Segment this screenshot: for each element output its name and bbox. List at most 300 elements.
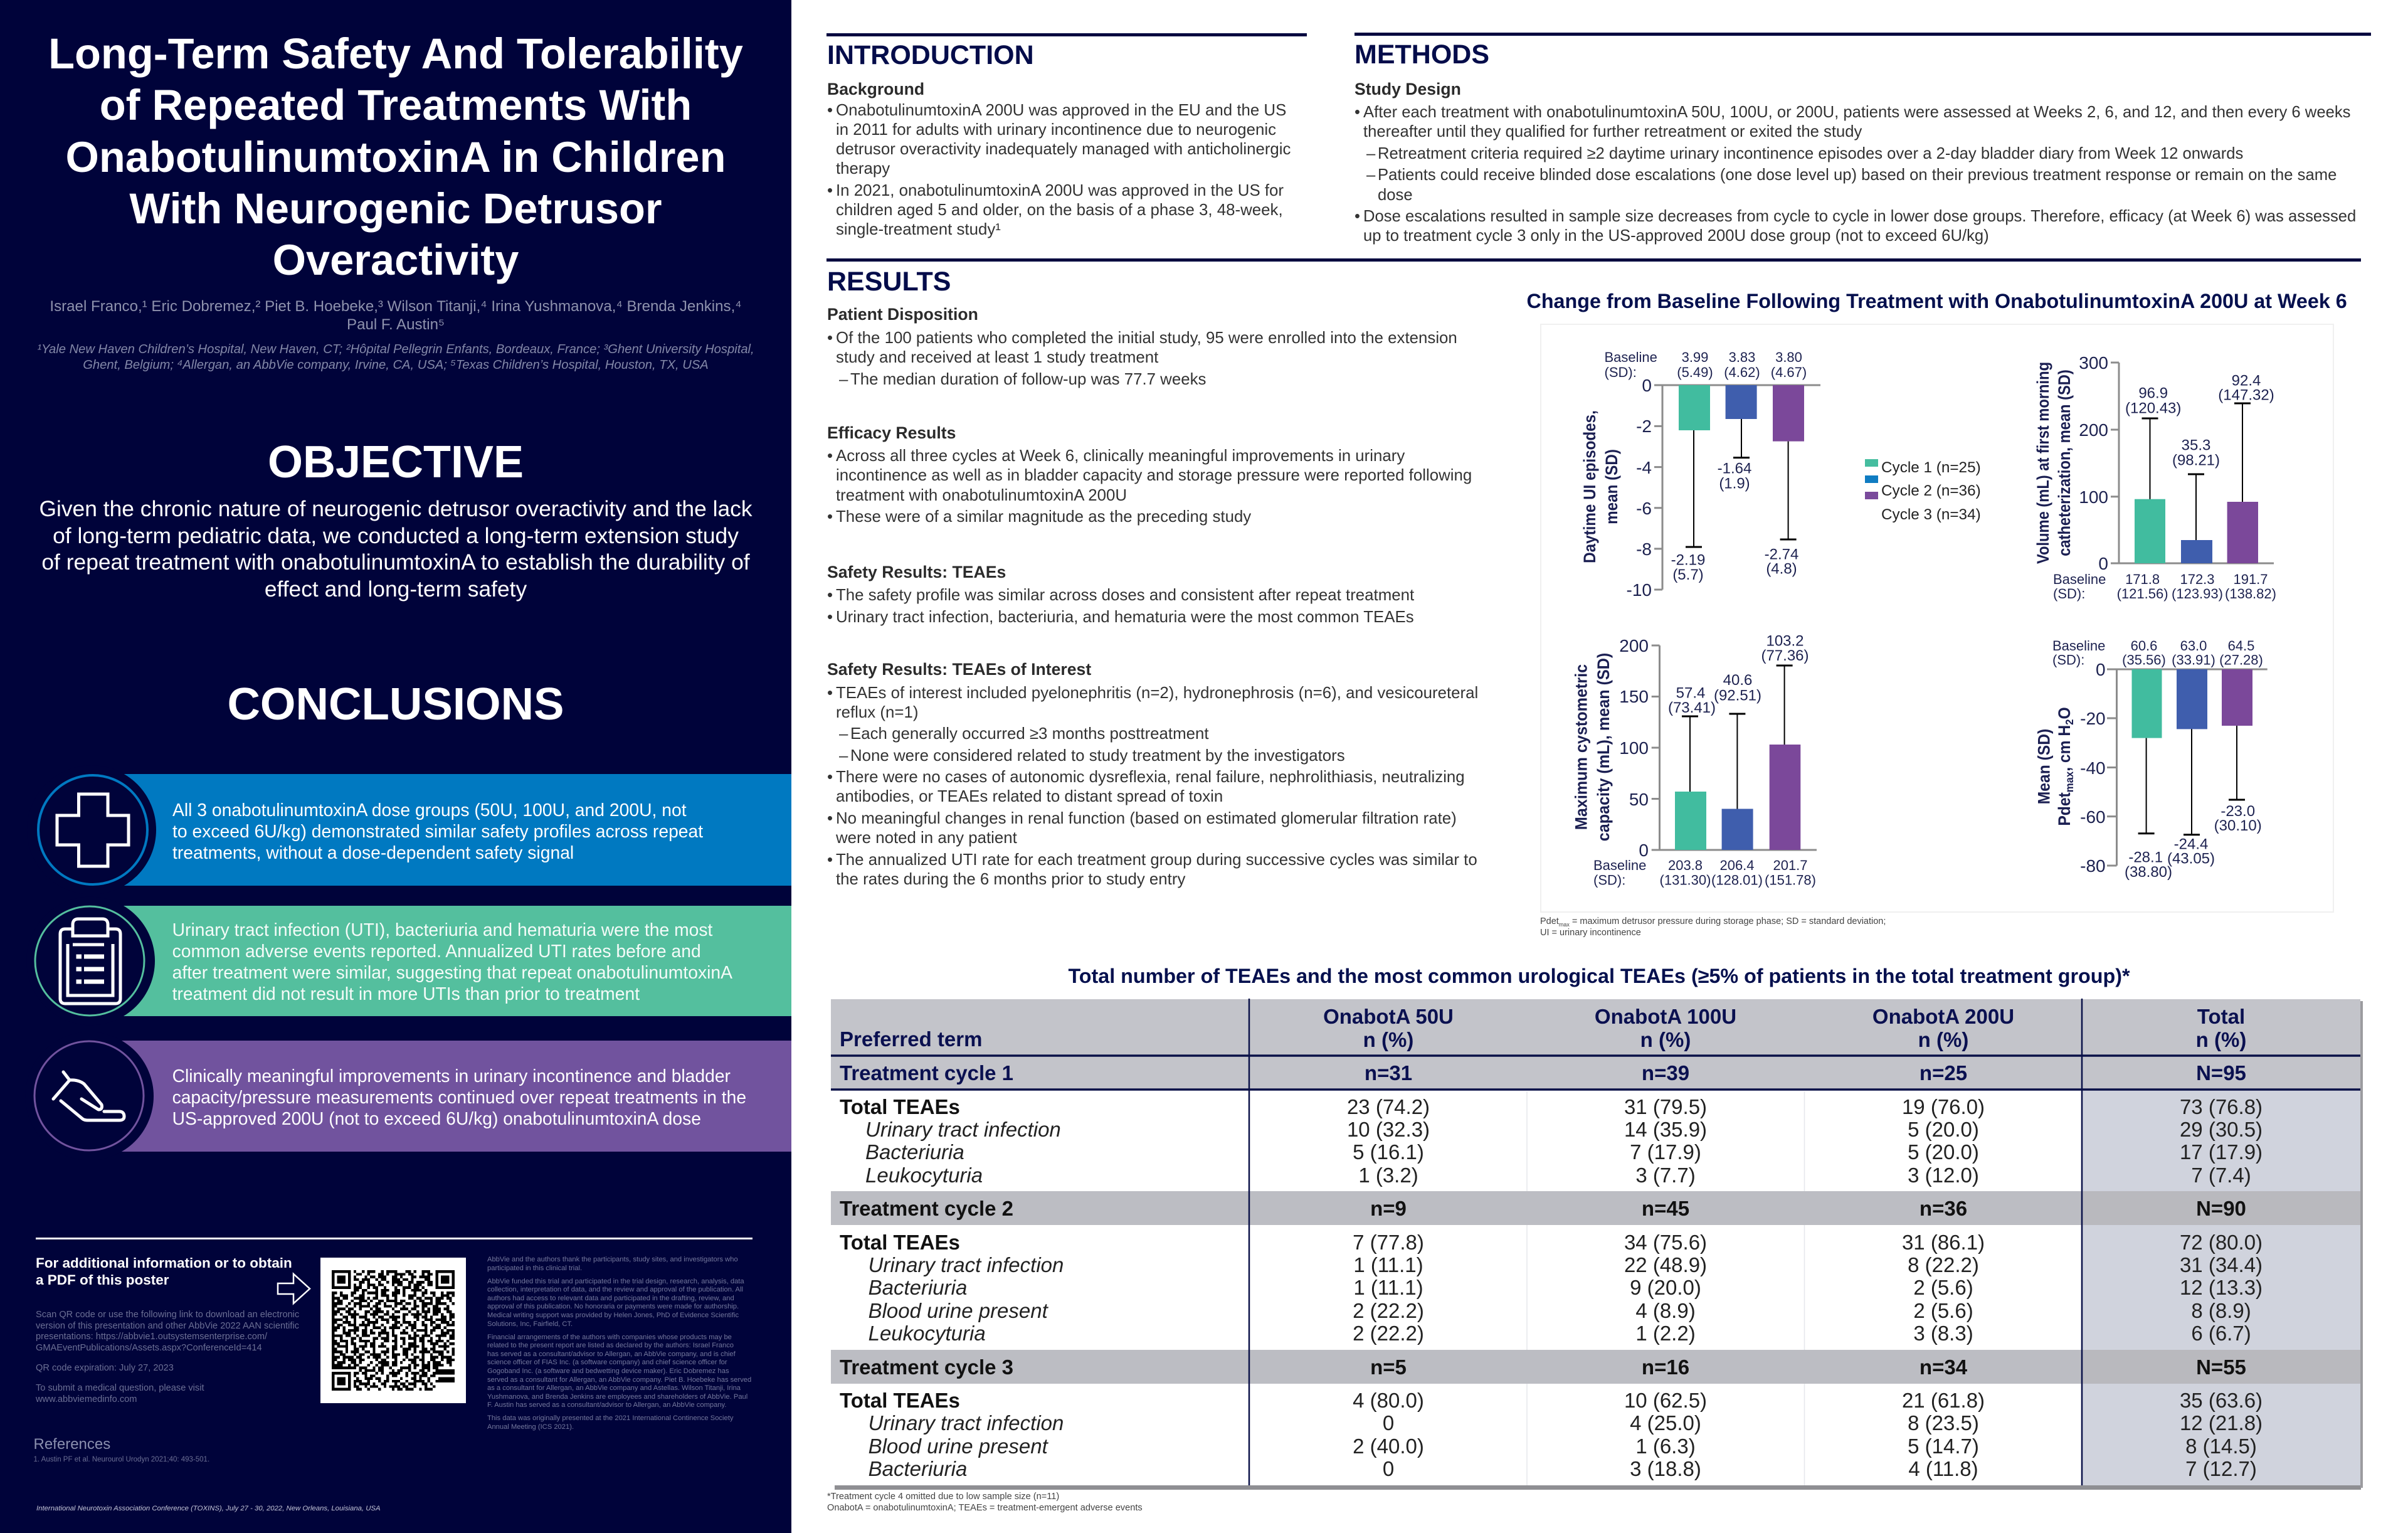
study design bullets: After each treatment with onabotulinumtoxinA 50U, 100U, or 200U, patients were assessed at Weeks 2, 6, and 12, and then every 6 weeks [1363,103,2350,121]
treatment cycle 3 rows: Total TEAEs [840,1389,960,1412]
objective text: of long-term pediatric data, we conducted a long-term extension study [53,523,739,548]
acknowledgements and disclosures: Medical writing support was provided by Helen Jones, PhD of Evidence Scientific [487,1312,739,1319]
chart: Pdetmax: Pdet [2056,792,2074,826]
chart: daytime UI episodes: -2 [1636,416,1652,436]
poster PDF heading [36,1255,292,1288]
treatment cycle 1 rows: 14 (35.9) [1624,1118,1707,1141]
treatment cycle 1 rows: 23 (74.2) [1347,1095,1430,1118]
download instructions: Scan QR code or use the following link to download an electronic [36,1310,299,1320]
chart: daytime UI episodes: Daytime UI episodes, [1581,410,1599,563]
TEAEs of interest bullets: TEAEs of interest included pyelonephritis (n=2), hydronephrosis (n=6), and vesicoureteral [836,684,1478,702]
background bullets: single-treatment study¹ [836,221,1001,238]
authors [50,298,742,333]
TEAEs of interest bullets: • [827,851,833,868]
table footnote: OnabotA = onabotulinumtoxinA; TEAEs = treatment-emergent adverse events [827,1503,1143,1513]
treatment cycle 1 rows: 19 (76.0) [1902,1095,1985,1118]
treatment cycle 1 rows: 7 (17.9) [1630,1140,1701,1164]
chart: maximum cystometric capacity: Baseline [1593,857,1646,873]
chart: maximum cystometric capacity: (151.78) [1765,872,1816,888]
treatment cycle 3 rows: Bacteriuria [869,1457,967,1480]
treatment cycle 3 rows: 8 (23.5) [1908,1411,1979,1435]
treatment cycle 2 rows: Blood urine present [869,1299,1049,1322]
chart: daytime UI episodes: mean (SD) [1603,449,1621,524]
treatment cycle 1 rows: 5 (20.0) [1908,1140,1979,1164]
chart: Pdetmax: 60.6 [2131,638,2157,654]
chart: daytime UI episodes: -10 [1627,580,1652,600]
treatment cycle 2 rows: 1 (11.1) [1353,1276,1423,1299]
chart: daytime UI episodes: -8 [1636,539,1652,559]
chart: daytime UI episodes: (1.9) [1719,475,1750,492]
chart: maximum cystometric capacity: 200 [1619,636,1649,655]
chart: Pdetmax: 64.5 [2228,638,2254,654]
chart: Pdetmax: (SD): [2052,652,2084,667]
treatment cycle 2 rows [840,1231,2263,1345]
treatment cycle 2 rows: Leukocyturia [869,1322,986,1345]
patient disposition bullets: – [839,371,848,388]
acknowledgements and disclosures: This data was originally presented at the 2021 International Continence Society [487,1414,733,1422]
treatment cycle 2 rows: 8 (22.2) [1908,1253,1979,1276]
chart: daytime UI episodes: Baseline [1604,349,1657,365]
legend: Cycle 2 (n=36) [1881,482,1981,499]
treatment cycle 2 rows: Urinary tract infection [869,1253,1064,1276]
patient disposition bullets [827,329,1457,388]
treatment cycle 3 header: n=5 [1370,1355,1407,1379]
chart: Pdetmax: -23.0 [2221,803,2255,820]
patient disposition bullets: The median duration of follow-up was 77.7 weeks [850,371,1206,388]
acknowledgements and disclosures: Gogoband Inc. (a software and bedwetting device maker). Eric Dobremez has [487,1367,729,1375]
treatment cycle 3 rows: 7 (12.7) [2185,1457,2257,1480]
treatment cycle 1 rows: 10 (32.3) [1347,1118,1430,1141]
treatment cycle 3 header: n=34 [1920,1355,1968,1379]
treatment cycle 2 rows: 3 (8.3) [1913,1322,1973,1345]
chart: volume at first morning catheterization: 92.4 [2232,373,2261,389]
treatment cycle 3 rows: 1 (6.3) [1635,1435,1696,1458]
chart: daytime UI episodes: (4.8) [1766,561,1797,577]
QR code expiration: QR code expiration: July 27, 2023 [36,1363,174,1373]
table header row: n (%) [1363,1028,1413,1051]
chart: maximum cystometric capacity: 57.4 [1676,685,1705,701]
conclusion 3 text: capacity/pressure measurements continued over repeat treatments in the [172,1087,746,1107]
treatment cycle 1 rows: 5 (16.1) [1353,1140,1424,1164]
chart: Pdetmax [2036,638,2268,881]
TEAEs of interest bullets: reflux (n=1) [836,704,918,721]
treatment cycle 2 header [840,1197,2246,1220]
safety TEAEs bullets: • [827,608,833,626]
acknowledgements and disclosures: science officer of FIAS Inc. (a software company) and chief science officer for [487,1359,727,1366]
efficacy results bullets [827,447,1472,526]
treatment cycle 1 header: Treatment cycle 1 [840,1061,1013,1085]
background bullets [827,102,1291,238]
efficacy results bullets: These were of a similar magnitude as the preceding study [836,508,1251,526]
treatment cycle 2 rows: 7 (77.8) [1353,1231,1424,1254]
chart: Pdetmax: 2 [2062,719,2076,725]
treatment cycle 3 header: n=16 [1642,1355,1689,1379]
treatment cycle 2 rows: Bacteriuria [869,1276,967,1299]
chart: Pdetmax: -24.4 [2174,835,2208,853]
study design bullets: thereafter until they qualified for further retreatment or exited the study [1363,123,1862,141]
chart: Pdetmax: -60 [2080,807,2106,827]
treatment cycle 1 rows: Urinary tract infection [865,1118,1061,1141]
chart: volume at first morning catheterization: 200 [2079,420,2108,440]
chart: Pdetmax: (30.10) [2214,817,2262,834]
safety TEAEs bullets: The safety profile was similar across doses and consistent after repeat treatment [836,586,1414,604]
acknowledgements and disclosures: AbbVie funded this trial and participated in the trial design, research, analysis, data [487,1278,744,1285]
background subheading: Background [827,79,924,98]
affiliations [37,342,754,371]
objective text: effect and long-term safety [265,576,527,602]
methods panel [1354,40,2356,245]
study design bullets: • [1354,103,1360,121]
conclusion 2 text: common adverse events reported. Annualized UTI rates before and [172,941,701,961]
chart: daytime UI episodes: -2.74 [1765,546,1798,563]
TEAEs of interest bullets: antibodies, or TEAEs related to distant spread of toxin [836,788,1223,805]
table header row: n (%) [1640,1028,1691,1051]
conclusion 2 text: Urinary tract infection (UTI), bacteriuria and hematuria were the most [172,920,712,940]
chart: volume at first morning catheterization: (147.32) [2218,386,2274,404]
treatment cycle 3 rows [840,1389,2263,1480]
table header row: OnabotA 50U [1323,1005,1454,1028]
chart: maximum cystometric capacity: (131.30) [1660,872,1711,888]
chart: Pdetmax: (38.80) [2125,864,2172,881]
TEAE table [831,999,2363,1490]
efficacy results bullets: treatment with onabotulinumtoxinA 200U [836,487,1127,504]
treatment cycle 1 rows: Total TEAEs [840,1095,960,1118]
background bullets: In 2021, onabotulinumtoxinA 200U was approved in the US for [836,182,1284,199]
chart: Pdetmax: -28.1 [2128,849,2163,866]
chart: volume at first morning catheterization: 0 [2098,554,2108,573]
background bullets: • [827,102,833,119]
conclusions heading: CONCLUSIONS [227,679,564,729]
treatment cycle 2 rows: 22 (48.9) [1624,1253,1707,1276]
safety TEAEs subheading: Safety Results: TEAEs [827,562,1006,581]
conclusion 2 text [172,920,732,1004]
efficacy results bullets: • [827,508,833,526]
TEAEs of interest bullets: – [839,725,848,743]
table title: Total number of TEAEs and the most common urological TEAEs (≥5% of patients in the total treatment group)* [1068,965,2130,987]
conclusion 2 banner [34,906,791,1016]
acknowledgements and disclosures: Financial arrangements of the authors with companies whose products may be [487,1334,732,1341]
chart: volume at first morning catheterization: 100 [2079,487,2108,507]
introduction heading: INTRODUCTION [827,40,1034,70]
table header row: Preferred term [840,1027,982,1051]
chart: maximum cystometric capacity: capacity (mL), mean (SD) [1595,653,1613,841]
TEAEs of interest bullets: None were considered related to study treatment by the investigators [850,747,1345,765]
efficacy results subheading: Efficacy Results [827,423,956,442]
study design bullets: Retreatment criteria required ≥2 daytime urinary incontinence episodes over a 2-day bladder diary from Week 12 onwards [1378,145,2243,162]
acknowledgements and disclosures: authors had access to relevant data and participated in the drafting, review, and [487,1295,734,1302]
acknowledgements and disclosures: collection, interpretation of data, and the review and approval of the publication. All [487,1286,743,1293]
chart: daytime UI episodes: -2.19 [1671,552,1705,568]
treatment cycle 3 header: N=55 [2196,1355,2246,1379]
chart: maximum cystometric capacity: (SD): [1593,872,1625,888]
treatment cycle 1 header: n=39 [1642,1061,1689,1085]
chart: Pdetmax: 63.0 [2180,638,2207,654]
authors: Paul F. Austin⁵ [347,316,445,333]
treatment cycle 2 header: n=9 [1370,1197,1407,1220]
TEAEs of interest bullets: No meaningful changes in renal function (based on estimated glomerular filtration rate) [836,810,1457,827]
legend [1865,459,1981,523]
chart: volume at first morning catheterization: Baseline [2053,571,2106,587]
chart section title: Change from Baseline Following Treatment with OnabotulinumtoxinA 200U at Week 6 [1526,290,2347,312]
chart: volume at first morning catheterization: 300 [2079,353,2108,373]
patient disposition subheading: Patient Disposition [827,305,978,324]
chart: maximum cystometric capacity: 0 [1639,841,1649,860]
patient disposition bullets: study and received at least 1 study treatment [836,349,1158,366]
efficacy results bullets: • [827,447,833,465]
title: of Repeated Treatments With [100,81,692,129]
poster PDF heading: a PDF of this poster [36,1272,169,1288]
TEAEs of interest bullets: The annualized UTI rate for each treatment group during successive cycles was similar to [836,851,1477,868]
conclusion 3 text [172,1066,746,1128]
TEAEs of interest bullets [827,684,1478,888]
treatment cycle 3 rows: 8 (14.5) [2185,1435,2257,1458]
results heading: RESULTS [827,267,951,297]
acknowledgements and disclosures [487,1256,751,1431]
chart: daytime UI episodes: -6 [1636,499,1652,518]
chart: daytime UI episodes: (5.7) [1672,566,1704,583]
chart: daytime UI episodes: (4.62) [1724,364,1760,380]
icon: medical cross [57,794,129,866]
title [48,29,743,284]
conclusion 1 text [172,799,703,862]
acknowledgements and disclosures: AbbVie and the authors thank the participants, study sites, and investigators who [487,1256,738,1263]
background bullets: • [827,182,833,199]
acknowledgements and disclosures: has served as a consultant/advisor to Allergan, an AbbVie company, and is chief [487,1350,736,1358]
treatment cycle 3 rows: 0 [1383,1411,1394,1435]
chart: Pdetmax: Baseline [2052,638,2105,654]
treatment cycle 3 rows: 4 (11.8) [1908,1457,1978,1480]
chart footnote [1540,916,1886,938]
icon: hand with syringe [53,1072,124,1120]
objective text: Given the chronic nature of neurogenic detrusor overactivity and the lack [39,496,752,521]
treatment cycle 1 rows: 3 (7.7) [1635,1164,1696,1187]
TEAEs of interest bullets: There were no cases of autonomic dysreflexia, renal failure, nephrolithiasis, neutralizing [836,768,1465,786]
chart: Pdetmax: (33.91) [2172,652,2215,667]
reference item: 1. Austin PF et al. Neurourol Urodyn 2021;40: 493-501. [34,1456,209,1463]
TEAEs of interest bullets: • [827,810,833,827]
table header row: n (%) [2196,1028,2246,1051]
table header row: Total [2197,1005,2245,1028]
chart: maximum cystometric capacity [1573,632,1817,888]
chart: maximum cystometric capacity: (77.36) [1761,647,1809,664]
treatment cycle 3 rows: 35 (63.6) [2180,1389,2263,1412]
treatment cycle 1 header [840,1061,2246,1085]
treatment cycle 3 rows: 4 (80.0) [1353,1389,1424,1412]
acknowledgements and disclosures: related to the present report are listed as declared by the authors: Israel Franco [487,1342,734,1349]
table header row: OnabotA 200U [1872,1005,2014,1028]
download instructions: GMAEventPublications/Assets.aspx?ConferenceId=414 [36,1342,262,1352]
chart: maximum cystometric capacity: 203.8 [1668,857,1703,873]
chart: maximum cystometric capacity: Maximum cystometric [1573,664,1591,830]
background bullets: children aged 5 and older, on the basis of a phase 3, 48-week, [836,201,1283,219]
treatment cycle 2 rows: 1 (11.1) [1353,1253,1423,1276]
conclusion 3 banner [34,1040,791,1152]
chart: daytime UI episodes: (4.67) [1771,364,1807,380]
TEAEs of interest bullets: Each generally occurred ≥3 months posttreatment [850,725,1209,743]
patient disposition bullets: Of the 100 patients who completed the initial study, 95 were enrolled into the extension [836,329,1457,347]
treatment cycle 2 rows: 31 (34.4) [2180,1253,2263,1276]
treatment cycle 2 header: n=45 [1642,1197,1689,1220]
chart: volume at first morning catheterization: 172.3 [2180,571,2215,587]
treatment cycle 1 header: N=95 [2196,1061,2246,1085]
chart: volume at first morning catheterization: (138.82) [2225,586,2276,602]
acknowledgements and disclosures: Yushmanova, and Brenda Jenkins are employees and shareholders of AbbVie. Paul [487,1393,747,1401]
chart: volume at first morning catheterization: catheterization, mean (SD) [2056,369,2074,556]
treatment cycle 2 rows: 2 (22.2) [1353,1299,1424,1322]
chart: volume at first morning catheterization: 191.7 [2233,571,2268,587]
treatment cycle 2 rows: 2 (22.2) [1353,1322,1424,1345]
table header row: n (%) [1918,1028,1968,1051]
treatment cycle 1 rows: 29 (30.5) [2180,1118,2263,1141]
treatment cycle 2 header: n=36 [1920,1197,1967,1220]
chart: volume at first morning catheterization: (SD): [2053,586,2085,602]
chart: Pdetmax: -80 [2080,856,2106,876]
TEAEs of interest bullets: – [839,747,848,765]
study design bullets: • [1354,208,1360,225]
TEAEs of interest bullets: • [827,768,833,786]
conclusion 2 text: treatment did not result in more UTIs than prior to treatment [172,984,640,1004]
study design bullets: Dose escalations resulted in sample size decreases from cycle to cycle in lower dose groups. Therefore, efficacy (at Week 6) was assessed [1363,208,2356,225]
TEAEs of interest bullets: were noted in any patient [836,829,1017,847]
treatment cycle 3 header [840,1355,2246,1379]
treatment cycle 2 rows: 72 (80.0) [2180,1231,2263,1254]
chart: volume at first morning catheterization: 171.8 [2125,571,2160,587]
chart: daytime UI episodes: 3.80 [1775,349,1802,365]
treatment cycle 3 rows: 0 [1383,1457,1394,1480]
chart footnote: Pdetmax = maximum detrusor pressure during storage phase; SD = standard deviation; [1540,916,1886,928]
chart: maximum cystometric capacity: 201.7 [1773,857,1808,873]
legend: Cycle 3 (n=34) [1881,506,1981,523]
treatment cycle 1 rows: 7 (7.4) [2191,1164,2251,1187]
conclusion 1 text: All 3 onabotulinumtoxinA dose groups (50U, 100U, and 200U, not [172,799,687,819]
chart: volume at first morning catheterization: (98.21) [2172,452,2220,469]
study design bullets: – [1366,145,1375,162]
treatment cycle 1 rows: 17 (17.9) [2180,1140,2263,1164]
study design bullets: up to treatment cycle 3 only in the US-approved 200U dose group (not to exceed 6U/kg) [1363,227,1989,245]
chart: Pdetmax: , cm H [2056,725,2074,772]
study design bullets: Patients could receive blinded dose escalations (one dose level up) based on their previous treatment response or remain on the same [1378,166,2337,184]
treatment cycle 3 rows: 10 (62.5) [1624,1389,1707,1412]
treatment cycle 3 rows: 5 (14.7) [1908,1435,1979,1458]
background bullets: detrusor overactivity inadequately managed with anticholinergic [836,141,1291,158]
chart: daytime UI episodes: 3.99 [1682,349,1708,365]
acknowledgements and disclosures: Solutions, Inc, Fairfield, CT. [487,1320,573,1328]
methods heading: METHODS [1354,40,1489,70]
treatment cycle 2 header: Treatment cycle 2 [840,1197,1013,1220]
QR code [320,1258,466,1403]
table header row [840,1005,2246,1051]
treatment cycle 1 rows: 73 (76.8) [2180,1095,2263,1118]
TEAEs of interest subheading: Safety Results: TEAEs of Interest [827,660,1091,679]
acknowledgements and disclosures: approval of this publication. No honoraria or payments were made for authorship. [487,1303,739,1310]
treatment cycle 2 rows: 8 (8.9) [2191,1299,2251,1322]
chart: volume at first morning catheterization: 35.3 [2182,437,2210,454]
results panel: text [827,267,1478,888]
chart footnote: UI = urinary incontinence [1540,928,1641,938]
chart: daytime UI episodes: (5.49) [1677,364,1713,380]
icon: clipboard [60,919,120,1004]
chart: Pdetmax: Mean (SD) [2036,729,2054,804]
medical question link: To submit a medical question, please visit [36,1383,204,1393]
chart: daytime UI episodes: 3.83 [1729,349,1755,365]
acknowledgements and disclosures: Annual Meeting (ICS 2021). [487,1423,574,1431]
objective text [39,496,752,602]
treatment cycle 2 rows: 9 (20.0) [1630,1276,1701,1299]
chart: volume at first morning catheterization [2034,353,2276,602]
study design bullets: – [1366,166,1375,184]
conclusion 1 text: to exceed 6U/kg) demonstrated similar safety profiles across repeat [172,820,703,841]
treatment cycle 2 rows: 31 (86.1) [1902,1231,1985,1254]
affiliations: Ghent, Belgium; ⁴Allergan, an AbbVie company, Irvine, CA, USA; ⁵Texas Children’s Hospital, Houston, TX, USA [83,358,709,371]
chart: maximum cystometric capacity: 40.6 [1723,672,1752,689]
title: With Neurogenic Detrusor [129,184,662,233]
conference footer: International Neurotoxin Association Conference (TOXINS), July 27 - 30, 2022, New Orleans, Louisiana, USA [36,1505,381,1512]
title: OnabotulinumtoxinA in Children [66,133,726,181]
chart: daytime UI episodes [1581,349,1820,600]
chart: Pdetmax: (27.28) [2219,652,2263,667]
chart: maximum cystometric capacity: 100 [1619,738,1649,758]
chart: volume at first morning catheterization: (121.56) [2117,586,2168,602]
authors: Israel Franco,¹ Eric Dobremez,² Piet B. Hoebeke,³ Wilson Titanji,⁴ Irina Yushmanova,⁴ Brenda Jenkins,⁴ [50,298,742,315]
TEAEs of interest bullets: • [827,684,833,702]
treatment cycle 1 rows: 5 (20.0) [1908,1118,1979,1141]
acknowledgements and disclosures: as a consultant for Allergan, an AbbVie company and Astellas. Wilson Titanji, Irina [487,1384,741,1392]
chart: volume at first morning catheterization: Volume (mL) at first morning [2034,362,2052,564]
download instructions: presentations: https://abbvie1.outsystemsenterprise.com/ [36,1332,267,1342]
treatment cycle 1 rows: Bacteriuria [865,1140,964,1164]
efficacy results bullets: incontinence as well as in bladder capacity and storage pressure were reported following [836,467,1472,484]
chart: daytime UI episodes: 0 [1642,376,1652,395]
conclusion 1 banner [37,774,791,886]
treatment cycle 2 rows: 2 (5.6) [1913,1276,1973,1299]
chart: Pdetmax: max [2062,771,2076,792]
conclusion 3 text: US-approved 200U (not to exceed 6U/kg) onabotulinumtoxinA dose [172,1108,701,1128]
chart: Pdetmax: 0 [2096,660,2106,679]
treatment cycle 2 rows: 2 (5.6) [1913,1299,1973,1322]
treatment cycle 3 rows: 2 (40.0) [1353,1435,1424,1458]
chart: volume at first morning catheterization: (123.93) [2172,586,2223,602]
treatment cycle 2 rows: 6 (6.7) [2191,1322,2251,1345]
references heading: References [34,1436,110,1453]
chart: daytime UI episodes: (SD): [1604,364,1637,380]
chart: Pdetmax: O [2056,707,2074,719]
background bullets: OnabotulinumtoxinA 200U was approved in the EU and the US [836,102,1286,119]
chart: maximum cystometric capacity: 206.4 [1719,857,1755,873]
treatment cycle 1 rows: 31 (79.5) [1624,1095,1707,1118]
patient disposition bullets: • [827,329,833,347]
poster PDF heading: For additional information or to obtain [36,1255,292,1271]
table header row: OnabotA 100U [1595,1005,1736,1028]
download instructions: version of this presentation and other AbbVie 2022 AAN scientific [36,1321,299,1331]
chart: maximum cystometric capacity: (128.01) [1711,872,1763,888]
treatment cycle 1 header: n=31 [1365,1061,1412,1085]
safety TEAEs bullets [827,586,1414,626]
objective heading: OBJECTIVE [268,437,524,487]
safety TEAEs bullets: • [827,586,833,604]
chart: volume at first morning catheterization: (120.43) [2125,400,2181,416]
treatment cycle 2 rows: 12 (13.3) [2180,1276,2263,1299]
treatment cycle 1 rows: 1 (3.2) [1358,1164,1418,1187]
medical question link [36,1383,204,1404]
efficacy results bullets: Across all three cycles at Week 6, clinically meaningful improvements in urinary [836,447,1405,465]
background bullets: in 2011 for adults with urinary incontinence due to neurogenic [836,121,1276,139]
chart: Pdetmax: -40 [2080,758,2106,778]
study design bullets: dose [1378,186,1413,204]
left navy panel [0,0,791,1533]
treatment cycle 3 rows: 3 (18.8) [1630,1457,1701,1480]
download instructions [36,1310,299,1352]
background bullets: therapy [836,160,890,178]
